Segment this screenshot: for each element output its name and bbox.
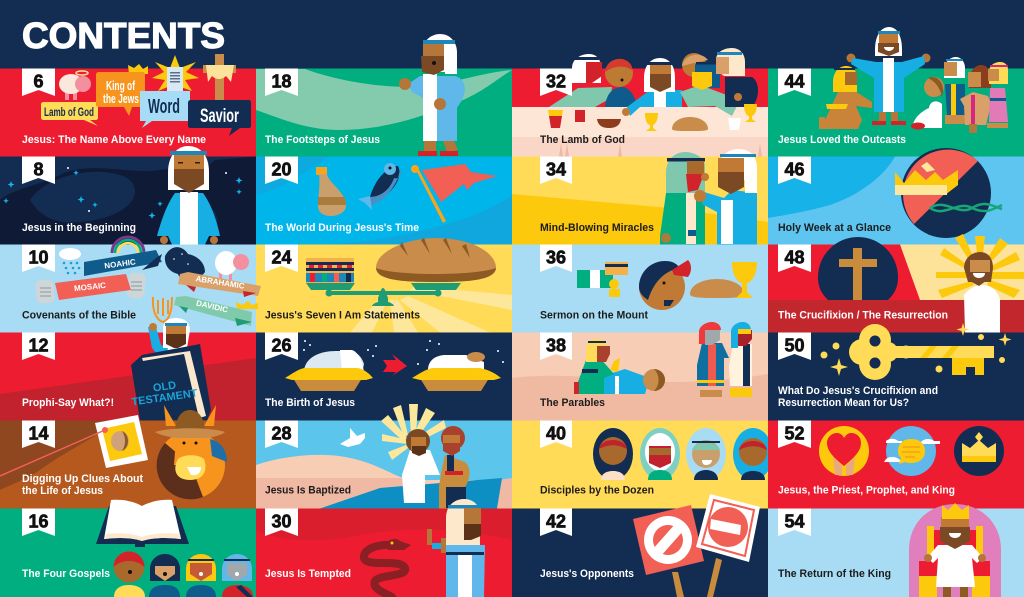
rays	[936, 234, 1024, 298]
portrait: John	[222, 554, 253, 597]
icon: crown of thorns	[930, 204, 1002, 211]
cell: 24 Jesus's Seven I Am Statements	[256, 238, 512, 332]
label: What Do Jesus's Crucifixion and	[778, 385, 938, 397]
cell: 34 Mind-Blowing Miracles	[512, 149, 768, 244]
figure: Jesus walking	[399, 34, 465, 156]
cell: 26 The Birth of Jesus	[256, 332, 512, 420]
cell: 30 Jesus Is Tempted	[256, 499, 512, 597]
icon: sheep with halo	[59, 71, 91, 100]
icon: night blob with stars	[165, 247, 205, 280]
label: The Return of the King	[778, 568, 891, 580]
icon: goblet right	[744, 104, 757, 122]
banner: 26	[265, 332, 298, 360]
label: Jesus's Seven I Am Statements	[265, 310, 420, 322]
banner: 32	[540, 68, 572, 96]
icon: stone tablets right	[127, 272, 146, 299]
figure: John the Baptist	[439, 426, 470, 508]
header band	[0, 0, 1024, 69]
label: Mind-Blowing Miracles	[540, 222, 654, 234]
sign: prohibited	[633, 505, 704, 575]
icon: golden goblet	[732, 262, 757, 298]
label: Jesus Is Tempted	[265, 568, 351, 580]
banner: 10: 10	[28, 248, 49, 268]
label: Jesus's Opponents	[540, 568, 634, 580]
cell: 8 Jesus in the Beginning	[0, 146, 256, 245]
label: The Birth of Jesus	[265, 397, 355, 409]
icon: clue photograph	[95, 415, 148, 468]
title: CONTENTS	[22, 15, 225, 56]
banner: 12: 12	[28, 336, 49, 356]
label: Disciples by the Dozen	[540, 484, 654, 496]
icon: crown on navy	[954, 426, 1004, 476]
icon: flag on pole	[411, 164, 497, 223]
bubble: King of the Jews	[96, 72, 145, 116]
icon: red cup	[575, 110, 585, 122]
cell: 42 Jesus's Opponents	[512, 494, 768, 597]
icon: Old Testament book: TESTAMENT	[131, 387, 199, 409]
label: Resurrection Mean for Us?	[778, 397, 909, 409]
label: Jesus, the Priest, Prophet, and King	[778, 484, 955, 496]
banner: 14: 14	[28, 424, 49, 444]
icon: fries	[548, 110, 563, 128]
banner: 16	[22, 508, 55, 536]
banner: 18	[265, 68, 298, 96]
figure: woman in tan	[960, 65, 991, 133]
label	[778, 385, 938, 409]
banner: 26: 26	[271, 336, 292, 356]
banner: 44: 44	[784, 72, 805, 92]
portrait egg 2	[640, 428, 680, 480]
icon: fish	[358, 163, 401, 210]
figure: kneeling woman	[819, 66, 872, 129]
ribbon: MOSAIC: MOSAIC	[74, 281, 107, 293]
icon: small crown	[236, 301, 258, 309]
ribbon: NOAHIC: NOAHIC	[104, 257, 136, 271]
figure: Jesus	[402, 429, 440, 503]
icon: clay jar	[316, 167, 346, 216]
cell: 6 Jesus: The Name Above Every Name	[0, 54, 256, 156]
icon: heart in hands	[819, 426, 869, 476]
banner: 34	[540, 156, 572, 184]
stars	[303, 340, 504, 365]
icon: cross with cloth	[203, 54, 236, 100]
label: Sermon on the Mount	[540, 310, 648, 322]
label: Jesus in the Beginning	[22, 222, 136, 234]
figure: disciple in navy	[716, 48, 758, 107]
cell: 12 Prophi-Say What?!	[0, 318, 256, 420]
label: The Crucifixion / The Resurrection	[778, 310, 948, 322]
banner: 54	[778, 508, 811, 536]
figure: shocked head	[639, 260, 691, 310]
banner: 16: 16	[28, 512, 49, 532]
cell: 28 Jesus Is Baptized	[256, 404, 512, 508]
figure: Jesus arms raised	[846, 27, 930, 125]
cell: 40 Disciples by the Dozen	[512, 420, 773, 508]
banner: 20	[265, 156, 298, 184]
figure: Jesus refusing	[427, 499, 485, 597]
banner: 42: 42	[546, 512, 566, 532]
banner: 38	[540, 332, 572, 360]
stars and dots	[820, 323, 1012, 376]
banner: 38: 38	[546, 336, 566, 356]
label: The Parables	[540, 397, 605, 409]
red string	[0, 427, 108, 476]
cell: 46 Holy Week at a Glance	[768, 148, 1024, 244]
ribbon: DAVIDIC	[174, 296, 252, 326]
figure: risen Jesus	[964, 252, 1000, 332]
icon: crowd	[306, 258, 354, 283]
banner: 48: 48	[784, 248, 805, 268]
icon: balance scale	[306, 283, 461, 306]
icon: baby in manger	[412, 352, 501, 391]
cell: 36 Sermon on the Mount	[512, 244, 768, 332]
icon: bread	[690, 279, 744, 298]
cell: 48 The Crucifixion / The Resurrection	[768, 234, 1024, 332]
banner: 34: 34	[546, 160, 566, 180]
banner: 8	[22, 156, 55, 184]
banner: 32: 32	[546, 72, 566, 92]
banner: 36	[540, 244, 572, 272]
figure: disciple in teal	[549, 54, 612, 107]
figure: Jesus standing	[157, 146, 220, 245]
bubble: Lamb of God	[41, 102, 98, 126]
portrait egg 3	[686, 428, 726, 480]
figure: disciples behind	[680, 53, 740, 116]
banner: 24: 24	[271, 248, 292, 268]
bubble: Lamb of God: Lamb of God	[44, 105, 94, 119]
ribbon: MOSAIC	[55, 274, 131, 300]
icon: crown	[942, 503, 969, 519]
cell: 18 The Footsteps of Jesus	[256, 34, 512, 156]
cell: 20 The World During Jesus's Time	[256, 156, 512, 244]
cell: 14 Digging Up Clues	[0, 405, 256, 508]
icon: dove	[340, 428, 365, 447]
icon: stone tablets left	[35, 279, 55, 304]
cell: 38 The Parables	[512, 322, 768, 420]
ribbon: NOAHIC	[84, 250, 162, 276]
banner: 28: 28	[271, 424, 292, 444]
banner: 52: 52	[784, 424, 805, 444]
figure: prophet popping out of book	[148, 318, 190, 358]
figure: seated child	[911, 77, 944, 130]
portrait egg 1	[593, 428, 633, 480]
ribbon: ABRAHAMIC	[178, 272, 261, 297]
icon: lamb in manger	[285, 350, 373, 391]
banner: 46	[778, 156, 811, 184]
bubble: Word: Word	[148, 96, 180, 118]
bubble: Word	[140, 91, 190, 128]
banner: 6: 6	[33, 72, 44, 92]
cell: 10 Covenants of the Bible	[0, 237, 261, 332]
sign: no entry	[696, 494, 760, 562]
figure: donkey in hat	[155, 405, 227, 499]
icon: open book	[96, 500, 189, 547]
arch	[909, 504, 1001, 597]
icon: bread loaf	[376, 238, 496, 282]
ribbon: ABRAHAMIC: ABRAHAMIC	[195, 274, 245, 291]
label: Jesus Is Baptized	[265, 484, 351, 496]
arrow: red transformation	[383, 354, 407, 376]
figure: Levite	[729, 322, 752, 397]
cell: 32 The Lamb of God	[512, 48, 768, 156]
icon: goblet	[645, 113, 658, 131]
cell: 50 What Do Jesus's Crucifixion and Resurrection Mean for Us?	[768, 323, 1024, 420]
icon: split circle	[901, 148, 991, 238]
poles	[672, 558, 722, 597]
banner: 44	[778, 68, 811, 96]
label: Jesus: The Name Above Every Name	[22, 134, 206, 146]
icon: crown	[128, 64, 148, 74]
banner: 42	[540, 508, 572, 536]
icon: sunburst tablet	[152, 55, 199, 96]
banner: 50: 50	[784, 336, 805, 356]
label: Digging Up Clues About	[22, 473, 143, 485]
banner: 12	[22, 332, 55, 360]
portrait: Matthew	[114, 551, 145, 597]
figure: man in blue	[944, 57, 965, 124]
banner: 46: 46	[784, 160, 805, 180]
sunburst	[381, 404, 446, 460]
icon: lyre	[153, 297, 172, 322]
banner: 30: 30	[271, 512, 292, 532]
icon: rain cloud	[59, 248, 81, 274]
portrait egg 4	[733, 428, 773, 480]
water band	[320, 478, 502, 508]
label	[22, 473, 143, 497]
figure: Jesus healing	[694, 149, 757, 244]
label: The Lamb of God	[540, 134, 625, 146]
cell: 54 The Return of the King	[768, 503, 1024, 597]
icon: serpent	[364, 539, 411, 597]
bubble: Savior	[188, 100, 251, 136]
banner: 20: 20	[271, 160, 292, 180]
figure: healed man	[660, 152, 705, 244]
banner: 14	[22, 420, 55, 448]
cell: 44 Jesus Loved the Outcasts	[768, 27, 1024, 156]
banner: 24	[265, 244, 298, 272]
figure: kneeling Samaritan	[574, 339, 620, 394]
banner: 48	[778, 244, 811, 272]
label: Holy Week at a Glance	[778, 222, 891, 234]
icon: rainbow	[112, 237, 144, 253]
label: Covenants of the Bible	[22, 310, 136, 322]
banner: 52	[778, 420, 811, 448]
label: The World During Jesus's Time	[265, 222, 419, 234]
label: Prophi-Say What?!	[22, 397, 114, 409]
icon: speech bubble in sky	[884, 426, 940, 476]
icon: sheep	[215, 251, 249, 280]
banner: 54: 54	[784, 512, 805, 532]
portrait: Luke	[186, 554, 216, 597]
ribbon: DAVIDIC: DAVIDIC	[195, 298, 229, 315]
label: Jesus Loved the Outcasts	[778, 134, 906, 146]
bubble: Savior: Savior	[200, 106, 239, 127]
figure: King Jesus	[924, 517, 986, 597]
banner: 28	[265, 420, 298, 448]
cell: 52 Jesus, the Priest, Prophet, and King	[768, 420, 1024, 508]
label: the Life of Jesus	[22, 485, 103, 497]
icon: cross in circle	[818, 237, 898, 300]
portrait: Mark	[149, 554, 180, 597]
banner: 8: 8	[33, 160, 44, 180]
figure: woman in pink	[987, 62, 1008, 128]
figure: red-haired disciple	[605, 59, 637, 107]
icon: bowl	[597, 119, 621, 128]
icon: bread	[672, 117, 708, 131]
stars	[3, 167, 243, 219]
label: The Four Gospels	[22, 568, 110, 580]
label: The Footsteps of Jesus	[265, 134, 380, 146]
throne	[919, 526, 990, 597]
icon: takeout box	[728, 118, 741, 130]
bubble: King of the Jews: the Jews	[103, 91, 139, 106]
icon: Old Testament book: OLD	[152, 379, 177, 395]
banner: 30	[265, 508, 298, 536]
banner: 50	[778, 332, 811, 360]
cell: 16 The Four Gospels	[0, 500, 256, 597]
figure: Jesus at table	[622, 58, 682, 116]
icon: money and card	[577, 262, 628, 297]
banner: 40	[540, 420, 572, 448]
icon: Old Testament book	[131, 344, 211, 420]
icon: crown	[895, 162, 958, 195]
banner: 18: 18	[271, 72, 292, 92]
figure: injured man lying	[599, 369, 665, 394]
banner: 40: 40	[546, 424, 566, 444]
banner: 10	[22, 244, 55, 272]
icon: golden key	[849, 324, 994, 380]
banner: 6	[22, 68, 55, 96]
bubble: King of the Jews: King of	[106, 78, 135, 93]
banner: 36: 36	[546, 248, 566, 268]
figure: priest	[697, 322, 729, 397]
